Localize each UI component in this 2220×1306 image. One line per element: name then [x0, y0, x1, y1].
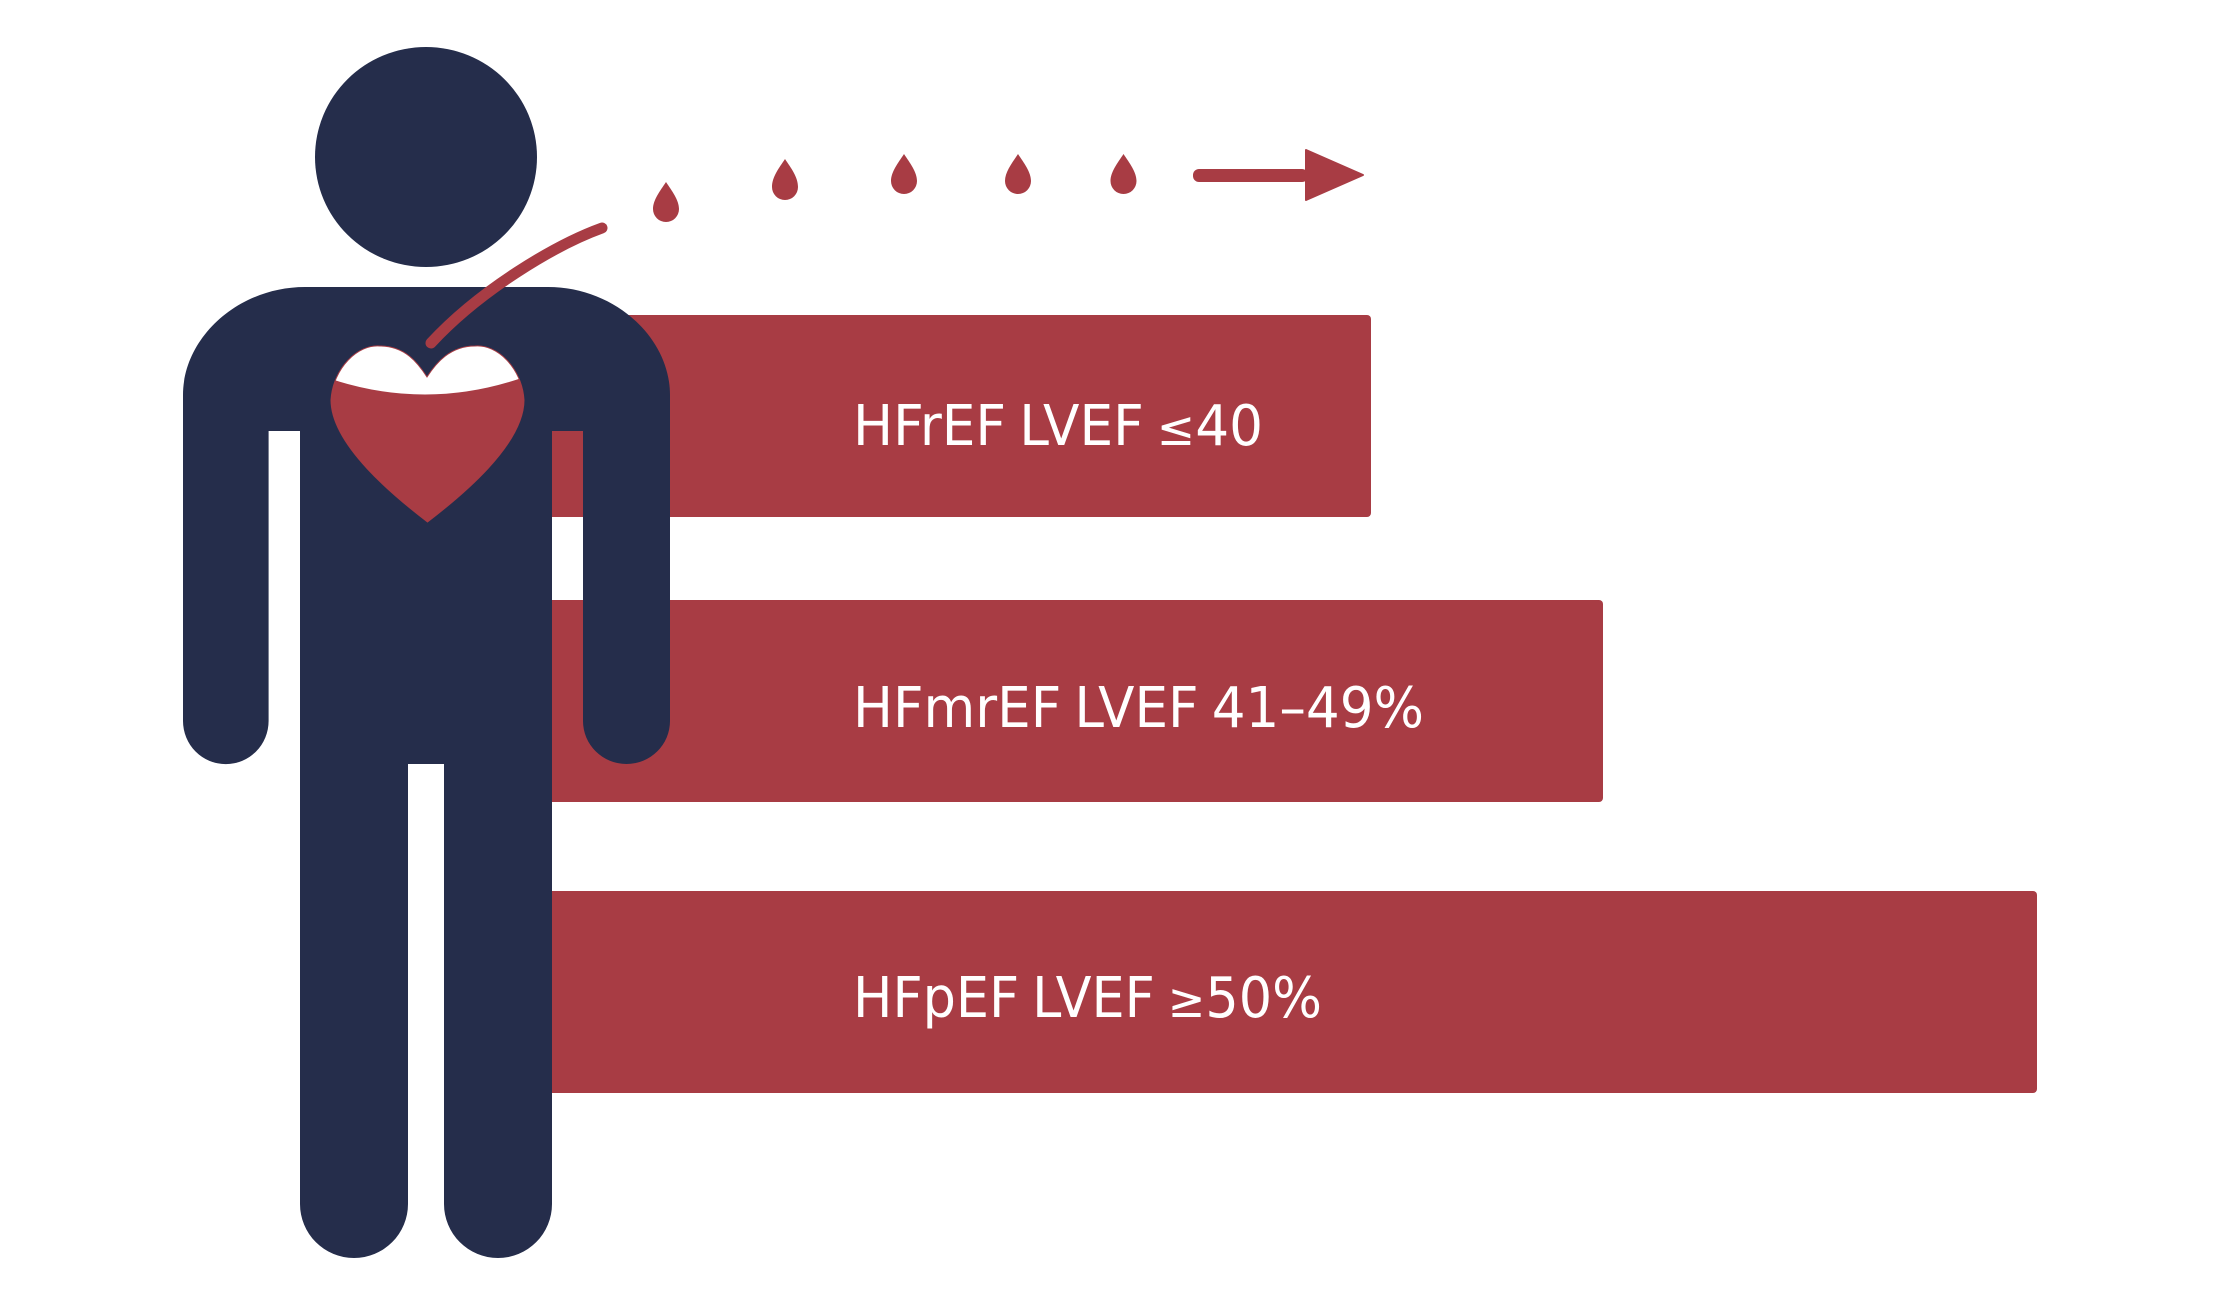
infographic: heart failure types by ejection fraction: [183, 47, 2037, 1258]
bar: HFrEF: [540, 315, 1371, 517]
label: HFrEF LVEF ≤40: HFrEF LVEF ≤40: [853, 394, 1263, 459]
label: HFmrEF LVEF 41–49%: HFmrEF LVEF 41–49%: [853, 676, 1424, 741]
icon: blood drops: [653, 154, 1136, 222]
arrow: blood flow direction: [1193, 150, 1363, 200]
ejection line from heart: [431, 228, 602, 343]
drop 3: [891, 154, 917, 194]
icon: human figure with heart: [183, 47, 670, 1258]
drop 4: [1005, 154, 1031, 194]
drop 1: [653, 182, 679, 222]
label: HFpEF LVEF ≥50%: HFpEF LVEF ≥50%: [853, 966, 1322, 1031]
figure body: [183, 287, 670, 1258]
icon: heart partially filled: [325, 346, 530, 530]
drop 2: [772, 159, 798, 200]
drop 5: [1110, 154, 1136, 194]
bar: HFpEF: [540, 891, 2037, 1093]
bar: HFmrEF: [540, 600, 1603, 802]
figure head: [315, 47, 537, 267]
